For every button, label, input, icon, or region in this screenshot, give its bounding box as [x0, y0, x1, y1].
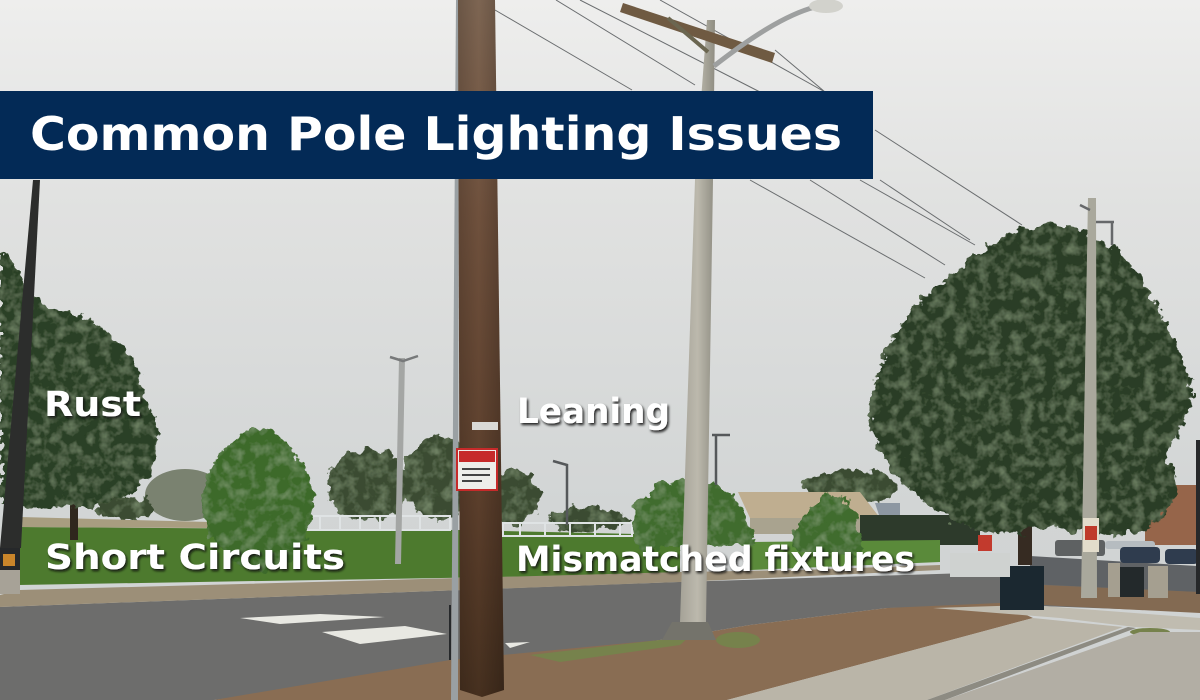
waste bins	[950, 535, 1168, 610]
wooden utility pole	[449, 0, 504, 700]
right soil bed	[1030, 585, 1200, 613]
sidewalk strip along the field	[0, 565, 940, 607]
road markings	[240, 614, 530, 648]
right concrete utility pole	[1080, 198, 1114, 598]
label: Leaning: Leaning	[517, 392, 670, 432]
left dark pole	[0, 180, 40, 594]
far right dark pole	[1196, 440, 1200, 594]
white fence	[305, 516, 632, 536]
tan path behind the field	[20, 517, 210, 528]
left tree	[0, 252, 158, 540]
large right tree	[870, 224, 1191, 565]
sidewalk	[727, 605, 1200, 700]
label: Mismatched fixtures: Mismatched fixtures	[516, 540, 915, 580]
label: Rust: Rust	[44, 385, 141, 425]
title text: Common Pole Lighting Issues	[30, 107, 842, 161]
road	[0, 572, 1200, 700]
title banner	[0, 91, 873, 179]
median soil strip	[214, 603, 1033, 700]
overhead wires	[495, 0, 1022, 278]
distant building	[738, 485, 1197, 545]
grass field	[18, 527, 680, 585]
warning sign on pole	[457, 449, 497, 490]
parked cars	[1055, 540, 1198, 564]
hedge and right lawn	[750, 515, 980, 570]
distant slim light poles	[390, 356, 730, 564]
label: Short Circuits: Short Circuits	[45, 538, 345, 578]
bush: centre-left	[203, 428, 314, 571]
distant treeline	[97, 436, 896, 532]
median grass patches	[530, 628, 1170, 662]
distant hazy hill	[145, 469, 225, 521]
concrete light pole with lamp arm	[620, 0, 843, 640]
bushes: right of pole	[632, 482, 861, 555]
